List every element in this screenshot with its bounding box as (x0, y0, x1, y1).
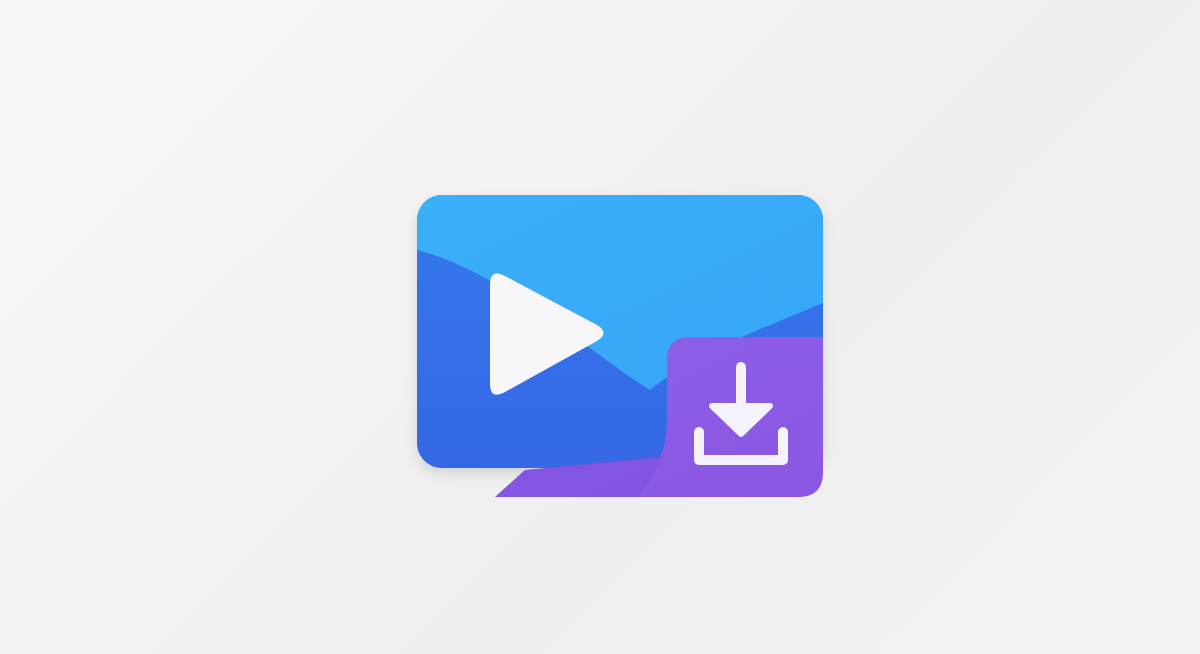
video card (417, 195, 823, 468)
icon: play triangle (490, 273, 604, 395)
icon: download arrow (699, 367, 783, 460)
download panel (495, 337, 823, 497)
icon: video download (414, 195, 826, 497)
